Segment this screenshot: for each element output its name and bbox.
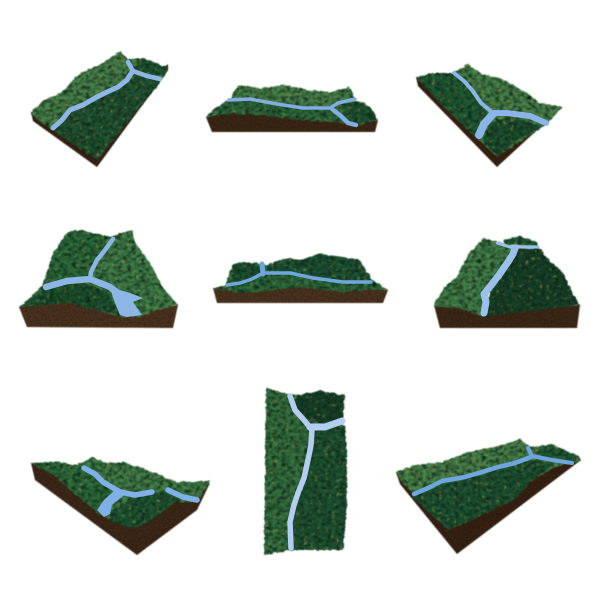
terrain block 5: middle centre <box>213 254 388 303</box>
soil base <box>31 64 168 167</box>
river <box>290 396 342 548</box>
terrain block 7: bottom left <box>31 457 210 555</box>
terrain block 3: top right <box>416 64 562 167</box>
land surface <box>19 230 178 317</box>
soil base <box>213 284 388 303</box>
land surface <box>206 85 378 125</box>
terrain block 2: top centre <box>206 85 378 132</box>
river <box>46 239 143 317</box>
land surface <box>31 457 210 528</box>
land surface <box>264 388 347 555</box>
terrain block 6: middle right <box>434 236 580 328</box>
soil base <box>416 77 562 167</box>
soil base <box>31 463 210 555</box>
river <box>227 264 371 285</box>
soil base <box>19 300 178 328</box>
land surface <box>213 254 388 293</box>
terrain block 9: bottom right <box>396 439 581 554</box>
soil base <box>206 110 378 132</box>
river <box>229 99 356 125</box>
terrain block 4: middle left <box>19 230 178 328</box>
land surface <box>434 236 580 317</box>
river <box>454 73 546 135</box>
river <box>53 62 160 128</box>
land surface <box>396 439 580 530</box>
soil base <box>434 305 580 328</box>
river <box>84 468 197 517</box>
land surface <box>416 64 562 157</box>
river <box>484 243 538 313</box>
land surface <box>31 51 168 160</box>
terrain block 1: top left <box>31 51 168 167</box>
terrain block 8: bottom centre <box>264 388 347 555</box>
river <box>414 448 572 494</box>
soil base <box>396 456 581 554</box>
